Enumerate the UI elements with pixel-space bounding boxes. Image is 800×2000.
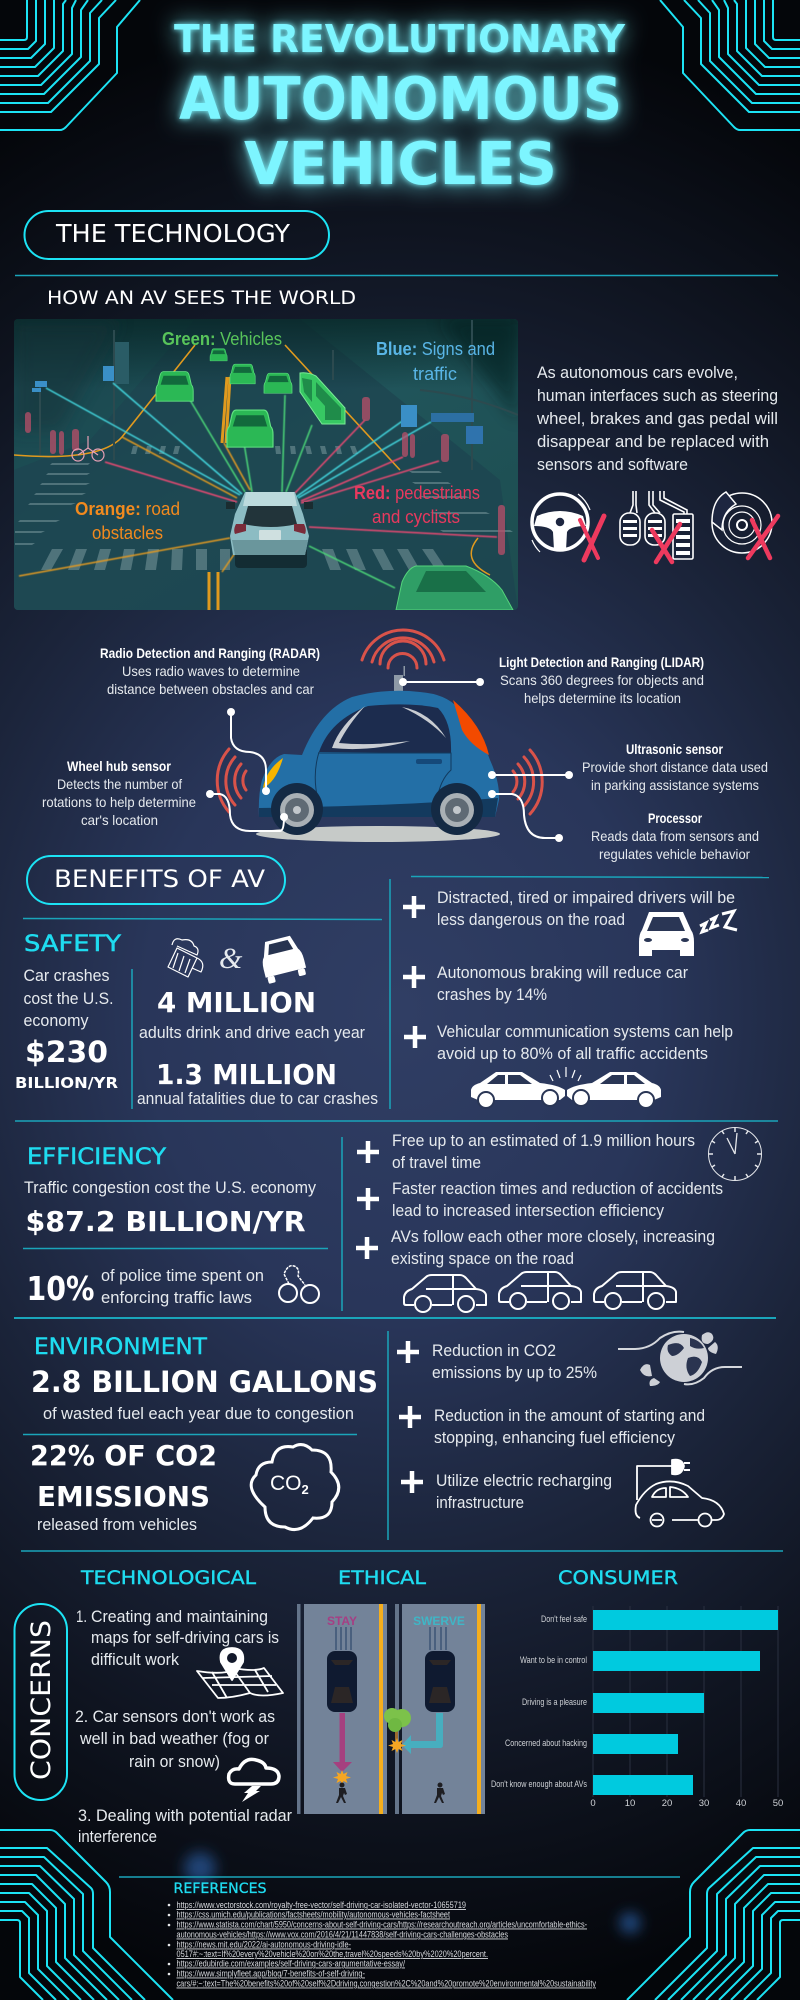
label: wheel hub sensor: rotations to help determine xyxy=(42,794,196,810)
label: radar: Radio Detection and Ranging (RADAR) xyxy=(100,645,320,661)
concern 1: 1. xyxy=(76,1608,87,1626)
concern 3: 3. Dealing with potential radar xyxy=(78,1807,292,1825)
bar chart: Concerned about hacking xyxy=(505,1738,587,1749)
icon: beer mug xyxy=(168,939,203,977)
icon: brake disc crossed xyxy=(712,492,778,558)
column: technological xyxy=(75,1567,292,1846)
stat: $230 billion/yr xyxy=(15,1035,118,1092)
main car xyxy=(226,492,313,568)
bar chart: Don't feel safe xyxy=(541,1614,587,1625)
bar chart: Want to be in control xyxy=(520,1655,587,1666)
icon: two cars crashing xyxy=(471,1067,661,1108)
benefit: vehicular communication xyxy=(437,1023,733,1063)
heading: efficiency: EFFICIENCY xyxy=(27,1145,167,1170)
photo label: blue: Blue: Signs and xyxy=(376,339,495,359)
benefit: reduction in CO2: emissions by up to 25% xyxy=(432,1364,597,1382)
plus icon xyxy=(403,966,425,988)
tree with burst xyxy=(384,1708,411,1753)
reference list: autonomous-vehicles/https://www.vox.com/2016/4/21/11447838/self-driving-cars-challenges-obstacles xyxy=(176,1930,508,1940)
label: lidar: Light Detection and Ranging (LIDAR) xyxy=(499,654,704,670)
circuit corner: bottom right xyxy=(627,1830,800,2000)
plus icon xyxy=(401,1471,423,1493)
circuit corner: top left xyxy=(0,0,140,130)
congestion cost text: Traffic congestion cost the U.S. economy xyxy=(24,1179,317,1197)
stat: $230 billion/yr: BILLION/YR xyxy=(15,1074,118,1092)
label: processor: Processor xyxy=(648,810,702,826)
bar chart xyxy=(491,1606,783,1809)
benefit: faster reaction xyxy=(392,1180,723,1220)
pointer: wheel hub xyxy=(206,790,288,831)
sensor lines xyxy=(19,383,497,588)
green detected vehicles xyxy=(156,349,513,610)
benefit: reduction in CO2 xyxy=(432,1342,597,1382)
stat: 1.3 million: annual fatalities due to car crashes xyxy=(137,1090,378,1108)
road: stay: STAY xyxy=(327,1614,357,1628)
reference list: https://www.simplyfleet.app/blog/7-benefits-of-self-driving- xyxy=(176,1968,365,1978)
title: VEHICLES xyxy=(244,129,557,198)
pedestrians xyxy=(25,397,505,555)
icon: globe with leaves xyxy=(618,1332,742,1386)
bar chart: Don't know enough about AVs xyxy=(491,1779,587,1790)
label: processor: Reads data from sensors and xyxy=(591,828,759,844)
car window xyxy=(319,704,451,753)
radar arcs: front xyxy=(217,749,246,812)
reference list: https://css.umich.edu/publications/factsheets/mobility/autonomous-vehicles-factsheet xyxy=(176,1910,450,1920)
pointer: radar xyxy=(227,708,270,795)
stat: 2.8 billion gallons: of wasted fuel each year due to congestion xyxy=(43,1405,354,1423)
plus icon xyxy=(357,1188,379,1210)
stat: 1.3 million xyxy=(137,1058,378,1108)
section heading: benefits of AV xyxy=(27,856,285,904)
heading: ethical: ETHICAL xyxy=(338,1567,426,1589)
icon: map with pin xyxy=(197,1648,283,1698)
concern 2: rain or snow) xyxy=(129,1753,220,1771)
bar chart: 20 xyxy=(662,1798,672,1809)
person: stay xyxy=(336,1782,347,1803)
benefit: distracted drivers: less dangerous on the road xyxy=(437,911,625,929)
heading: references: REFERENCES xyxy=(174,1881,267,1897)
photo label: orange xyxy=(76,502,179,539)
icon: CO2 cloud xyxy=(251,1445,339,1530)
concern 1: maps for self-driving cars is xyxy=(91,1629,279,1647)
benefit: follow closely: AVs follow each other more closely, increasing xyxy=(391,1228,715,1246)
photo label: orange: obstacles xyxy=(92,523,163,543)
plus icon xyxy=(356,1237,378,1259)
ampersand: & xyxy=(219,942,243,975)
section heading: benefits of AV: BENEFITS OF AV xyxy=(54,865,266,893)
text block: interfaces disappear: disappear and be replaced with xyxy=(537,433,769,451)
environment panel xyxy=(23,1335,378,1534)
title: THE REVOLUTIONARY xyxy=(174,17,625,61)
column: ethical xyxy=(297,1567,485,1814)
stat: 10% police time: of police time spent on xyxy=(101,1267,264,1285)
bar chart: 40 xyxy=(736,1798,746,1809)
safety cost text: economy xyxy=(24,1012,89,1030)
label: ultrasonic sensor: Provide short distance data used xyxy=(582,759,768,775)
icon: tilted car xyxy=(257,934,308,984)
stat: 2.8 billion gallons xyxy=(31,1365,378,1423)
text block: interfaces disappear: As autonomous cars evolve, xyxy=(537,364,738,382)
safety benefits list xyxy=(403,889,737,1108)
label: lidar xyxy=(499,654,704,706)
stat: 10% police time xyxy=(26,1267,264,1308)
heading: environment: ENVIRONMENT xyxy=(34,1335,208,1360)
plus icon xyxy=(403,896,425,918)
benefit: reduction in CO2: Reduction in CO2 xyxy=(432,1342,556,1360)
reference list: cars/#:~:text=The%20benefits%20of%20self%2Ddriving,congestion%2C%20and%20promote%20environmental%20sustainability xyxy=(176,1978,596,1988)
photo label: blue xyxy=(377,342,494,380)
icon: first car xyxy=(404,1275,486,1312)
road paint xyxy=(14,345,490,610)
label: radar xyxy=(100,645,320,697)
benefit: autonomous braking: crashes by 14% xyxy=(437,986,547,1004)
heading: safety: SAFETY xyxy=(24,932,122,957)
circuit corner: top right xyxy=(660,0,800,130)
plus icon xyxy=(357,1141,379,1163)
label: wheel hub sensor xyxy=(42,758,196,828)
blue glow spots xyxy=(184,1852,640,1933)
benefit: starting and stopping: Reduction in the amount of starting and xyxy=(434,1407,705,1425)
benefit: electric recharging: infrastructure xyxy=(436,1494,524,1512)
photo label: red: Red: pedestrians xyxy=(354,483,480,503)
pointer: processor xyxy=(488,790,563,842)
photo label: red: and cyclists xyxy=(372,507,460,527)
icon: handcuffs xyxy=(279,1266,319,1303)
environment benefits list xyxy=(397,1332,742,1526)
reference list: 0517#:~:text=If%20every%20vehicle%20on%20the,travel%20speeds%20by%2020%20percent. xyxy=(176,1949,488,1959)
concern 1: Creating and maintaining xyxy=(91,1608,268,1626)
icon: steering wheel crossed xyxy=(532,494,604,560)
label: ultrasonic sensor: Ultrasonic sensor xyxy=(626,741,723,757)
efficiency benefits list xyxy=(356,1128,762,1312)
label: lidar: helps determine its location xyxy=(524,690,681,706)
rear light xyxy=(453,700,489,755)
icon: third car xyxy=(594,1272,676,1309)
headlight xyxy=(263,758,283,788)
benefit: starting and stopping: stopping, enhancing fuel efficiency xyxy=(434,1429,676,1447)
stat: 22% of CO2 emissions: 22% OF CO2 xyxy=(30,1439,217,1472)
reference list: https://news.mit.edu/2022/ai-autonomous-driving-idle- xyxy=(176,1940,351,1950)
benefit: vehicular communication: avoid up to 80% of all traffic accidents xyxy=(437,1045,708,1063)
label: ultrasonic sensor xyxy=(582,741,768,793)
reference list: https://www.vectorstock.com/royalty-free-vector/self-driving-car-isolated-vector-10655719 xyxy=(176,1900,466,1910)
icon: sleeping car xyxy=(639,911,737,956)
stat: $230 billion/yr: $230 xyxy=(25,1035,108,1069)
benefit: autonomous braking xyxy=(437,964,688,1004)
icon: storm cloud xyxy=(229,1759,279,1802)
circuit corner: bottom left xyxy=(0,1830,173,2000)
icon: CO2 cloud: CO xyxy=(270,1472,302,1495)
reference list: https://www.statista.com/chart/5950/concerns-about-self-driving-cars/https://researchoutreach.org/articles/uncomfortable-ethics- xyxy=(176,1920,587,1930)
arrow: stay xyxy=(333,1713,352,1772)
stat: 10% police time: enforcing traffic laws xyxy=(101,1289,252,1307)
stat: 1.3 million: 1.3 MILLION xyxy=(156,1058,337,1091)
label: ultrasonic sensor: in parking assistance systems xyxy=(591,777,759,793)
stat: $87.2 billion/yr: $87.2 BILLION/YR xyxy=(26,1205,306,1238)
bar chart: 10 xyxy=(625,1798,635,1809)
bicycle xyxy=(72,436,104,461)
concern 3: interference xyxy=(78,1828,157,1846)
references xyxy=(168,1881,596,1988)
icon: clock xyxy=(708,1128,762,1180)
road: stay xyxy=(297,1604,387,1814)
label: wheel hub sensor: Wheel hub sensor xyxy=(67,758,171,774)
pointer: lidar xyxy=(399,678,484,686)
road surface xyxy=(14,365,511,610)
reference list: https://edubirdie.com/examples/self-driving-cars-argumentative-essay/ xyxy=(176,1958,405,1968)
rear wheel xyxy=(431,783,483,835)
stat: 4 million xyxy=(139,986,365,1042)
pointer: ultrasonic xyxy=(488,771,573,779)
concern 3 xyxy=(78,1807,292,1846)
plus icon xyxy=(399,1406,421,1428)
radar arcs: rear xyxy=(513,750,542,814)
benefit: distracted drivers xyxy=(437,889,735,929)
benefit: faster reaction: Faster reaction times and reduction of accidents xyxy=(392,1180,723,1198)
car: stay xyxy=(327,1651,357,1712)
icon: second car xyxy=(499,1272,581,1309)
reference list xyxy=(168,1900,596,1988)
concern 1 xyxy=(76,1608,279,1669)
stat: 2.8 billion gallons: 2.8 BILLION GALLONS xyxy=(31,1365,378,1399)
label: wheel hub sensor: Detects the number of xyxy=(57,776,182,792)
section heading: the technology: THE TECHNOLOGY xyxy=(55,219,291,248)
stat: 4 million: adults drink and drive each year xyxy=(139,1024,365,1042)
benefit: vehicular communication: Vehicular communication systems can help xyxy=(437,1023,733,1041)
title xyxy=(174,17,625,198)
stat: 22% of CO2 emissions: released from vehicles xyxy=(37,1516,197,1534)
benefit: faster reaction: lead to increased intersection efficiency xyxy=(392,1202,665,1220)
heading: technological: TECHNOLOGICAL xyxy=(80,1567,256,1589)
benefit: follow closely xyxy=(391,1228,715,1268)
efficiency panel xyxy=(23,1145,328,1308)
bar chart: 30 xyxy=(699,1798,709,1809)
label: radar: Uses radio waves to determine xyxy=(122,663,300,679)
label: lidar: Scans 360 degrees for objects and xyxy=(500,672,704,688)
safety cost text: Car crashes xyxy=(24,967,110,985)
bar chart: 50 xyxy=(773,1798,783,1809)
photo label: green: Green: Vehicles xyxy=(162,329,282,349)
icon: pedals crossed xyxy=(620,491,693,562)
concern 2 xyxy=(75,1708,275,1771)
text block: interfaces disappear xyxy=(536,364,778,474)
antenna xyxy=(394,666,405,691)
label: processor xyxy=(591,810,759,862)
label: processor: regulates vehicle behavior xyxy=(599,846,750,862)
benefit: distracted drivers: Distracted, tired or impaired drivers will be xyxy=(437,889,735,907)
safety cost text: cost the U.S. xyxy=(24,990,114,1008)
benefit: free up hours: of travel time xyxy=(392,1154,481,1172)
benefit: electric recharging xyxy=(436,1472,612,1512)
text block: interfaces disappear: wheel, brakes and gas pedal will xyxy=(536,410,778,428)
concern 1: difficult work xyxy=(91,1651,180,1669)
label: radar: distance between obstacles and car xyxy=(107,681,314,697)
column: consumer xyxy=(491,1567,783,1809)
front wheel xyxy=(271,783,323,835)
concern 2: well in bad weather (fog or xyxy=(79,1730,269,1748)
title: AUTONOMOUS xyxy=(179,64,622,133)
photo label: red xyxy=(354,483,480,527)
stat: 22% of CO2 emissions: EMISSIONS xyxy=(37,1480,210,1513)
benefit: free up hours xyxy=(392,1132,695,1172)
text block: interfaces disappear: human interfaces such as steering xyxy=(537,387,778,405)
label: wheel hub sensor: car's location xyxy=(81,812,158,828)
signs xyxy=(32,366,483,444)
bar chart: Driving is a pleasure xyxy=(522,1697,587,1708)
poles and signals xyxy=(40,320,518,470)
car sensor diagram xyxy=(206,630,573,842)
photo panel: how an AV sees the world xyxy=(14,319,518,610)
stat: 4 million: 4 MILLION xyxy=(157,986,316,1019)
burst: stay xyxy=(333,1770,351,1785)
photo label: orange: Orange: road xyxy=(75,499,180,519)
plus icon xyxy=(397,1341,419,1363)
text block: interfaces disappear: sensors and software xyxy=(537,456,688,474)
section heading: the technology xyxy=(24,211,329,259)
radar arcs: roof xyxy=(362,630,444,668)
car: swerve xyxy=(425,1651,455,1712)
car shadow xyxy=(256,826,500,842)
plus icon xyxy=(404,1026,426,1048)
person: swerve xyxy=(434,1782,445,1803)
road: swerve: SWERVE xyxy=(413,1614,465,1628)
concerns section label xyxy=(14,1604,67,1800)
icon: CO2 cloud: 2 xyxy=(302,1482,309,1497)
concerns section label: CONCERNS xyxy=(26,1620,57,1780)
stat: 22% of CO2 emissions xyxy=(30,1439,217,1534)
benefit: starting and stopping xyxy=(434,1407,705,1447)
photo label: blue: traffic xyxy=(413,364,457,384)
icon: electric car plug xyxy=(636,1460,724,1526)
subheading: how an AV sees the world: HOW AN AV SEES THE WORLD xyxy=(47,287,356,309)
benefit: electric recharging: Utilize electric recharging xyxy=(436,1472,612,1490)
crosswalks xyxy=(15,446,513,570)
concern 2: 2. Car sensors don't work as xyxy=(75,1708,275,1726)
car body xyxy=(259,691,499,817)
benefit: free up hours: Free up to an estimated of 1.9 million hours xyxy=(392,1132,695,1150)
arrow: swerve xyxy=(402,1713,443,1754)
stat: 10% police time: 10% xyxy=(26,1269,94,1308)
benefit: autonomous braking: Autonomous braking will reduce car xyxy=(437,964,688,982)
bar chart: 0 xyxy=(590,1798,596,1809)
road: swerve xyxy=(395,1604,485,1814)
heading: consumer: CONSUMER xyxy=(558,1567,678,1589)
safety cost text xyxy=(24,967,114,1030)
benefit: follow closely: existing space on the road xyxy=(391,1250,574,1268)
door lines xyxy=(315,752,451,800)
safety panel xyxy=(15,932,378,1109)
